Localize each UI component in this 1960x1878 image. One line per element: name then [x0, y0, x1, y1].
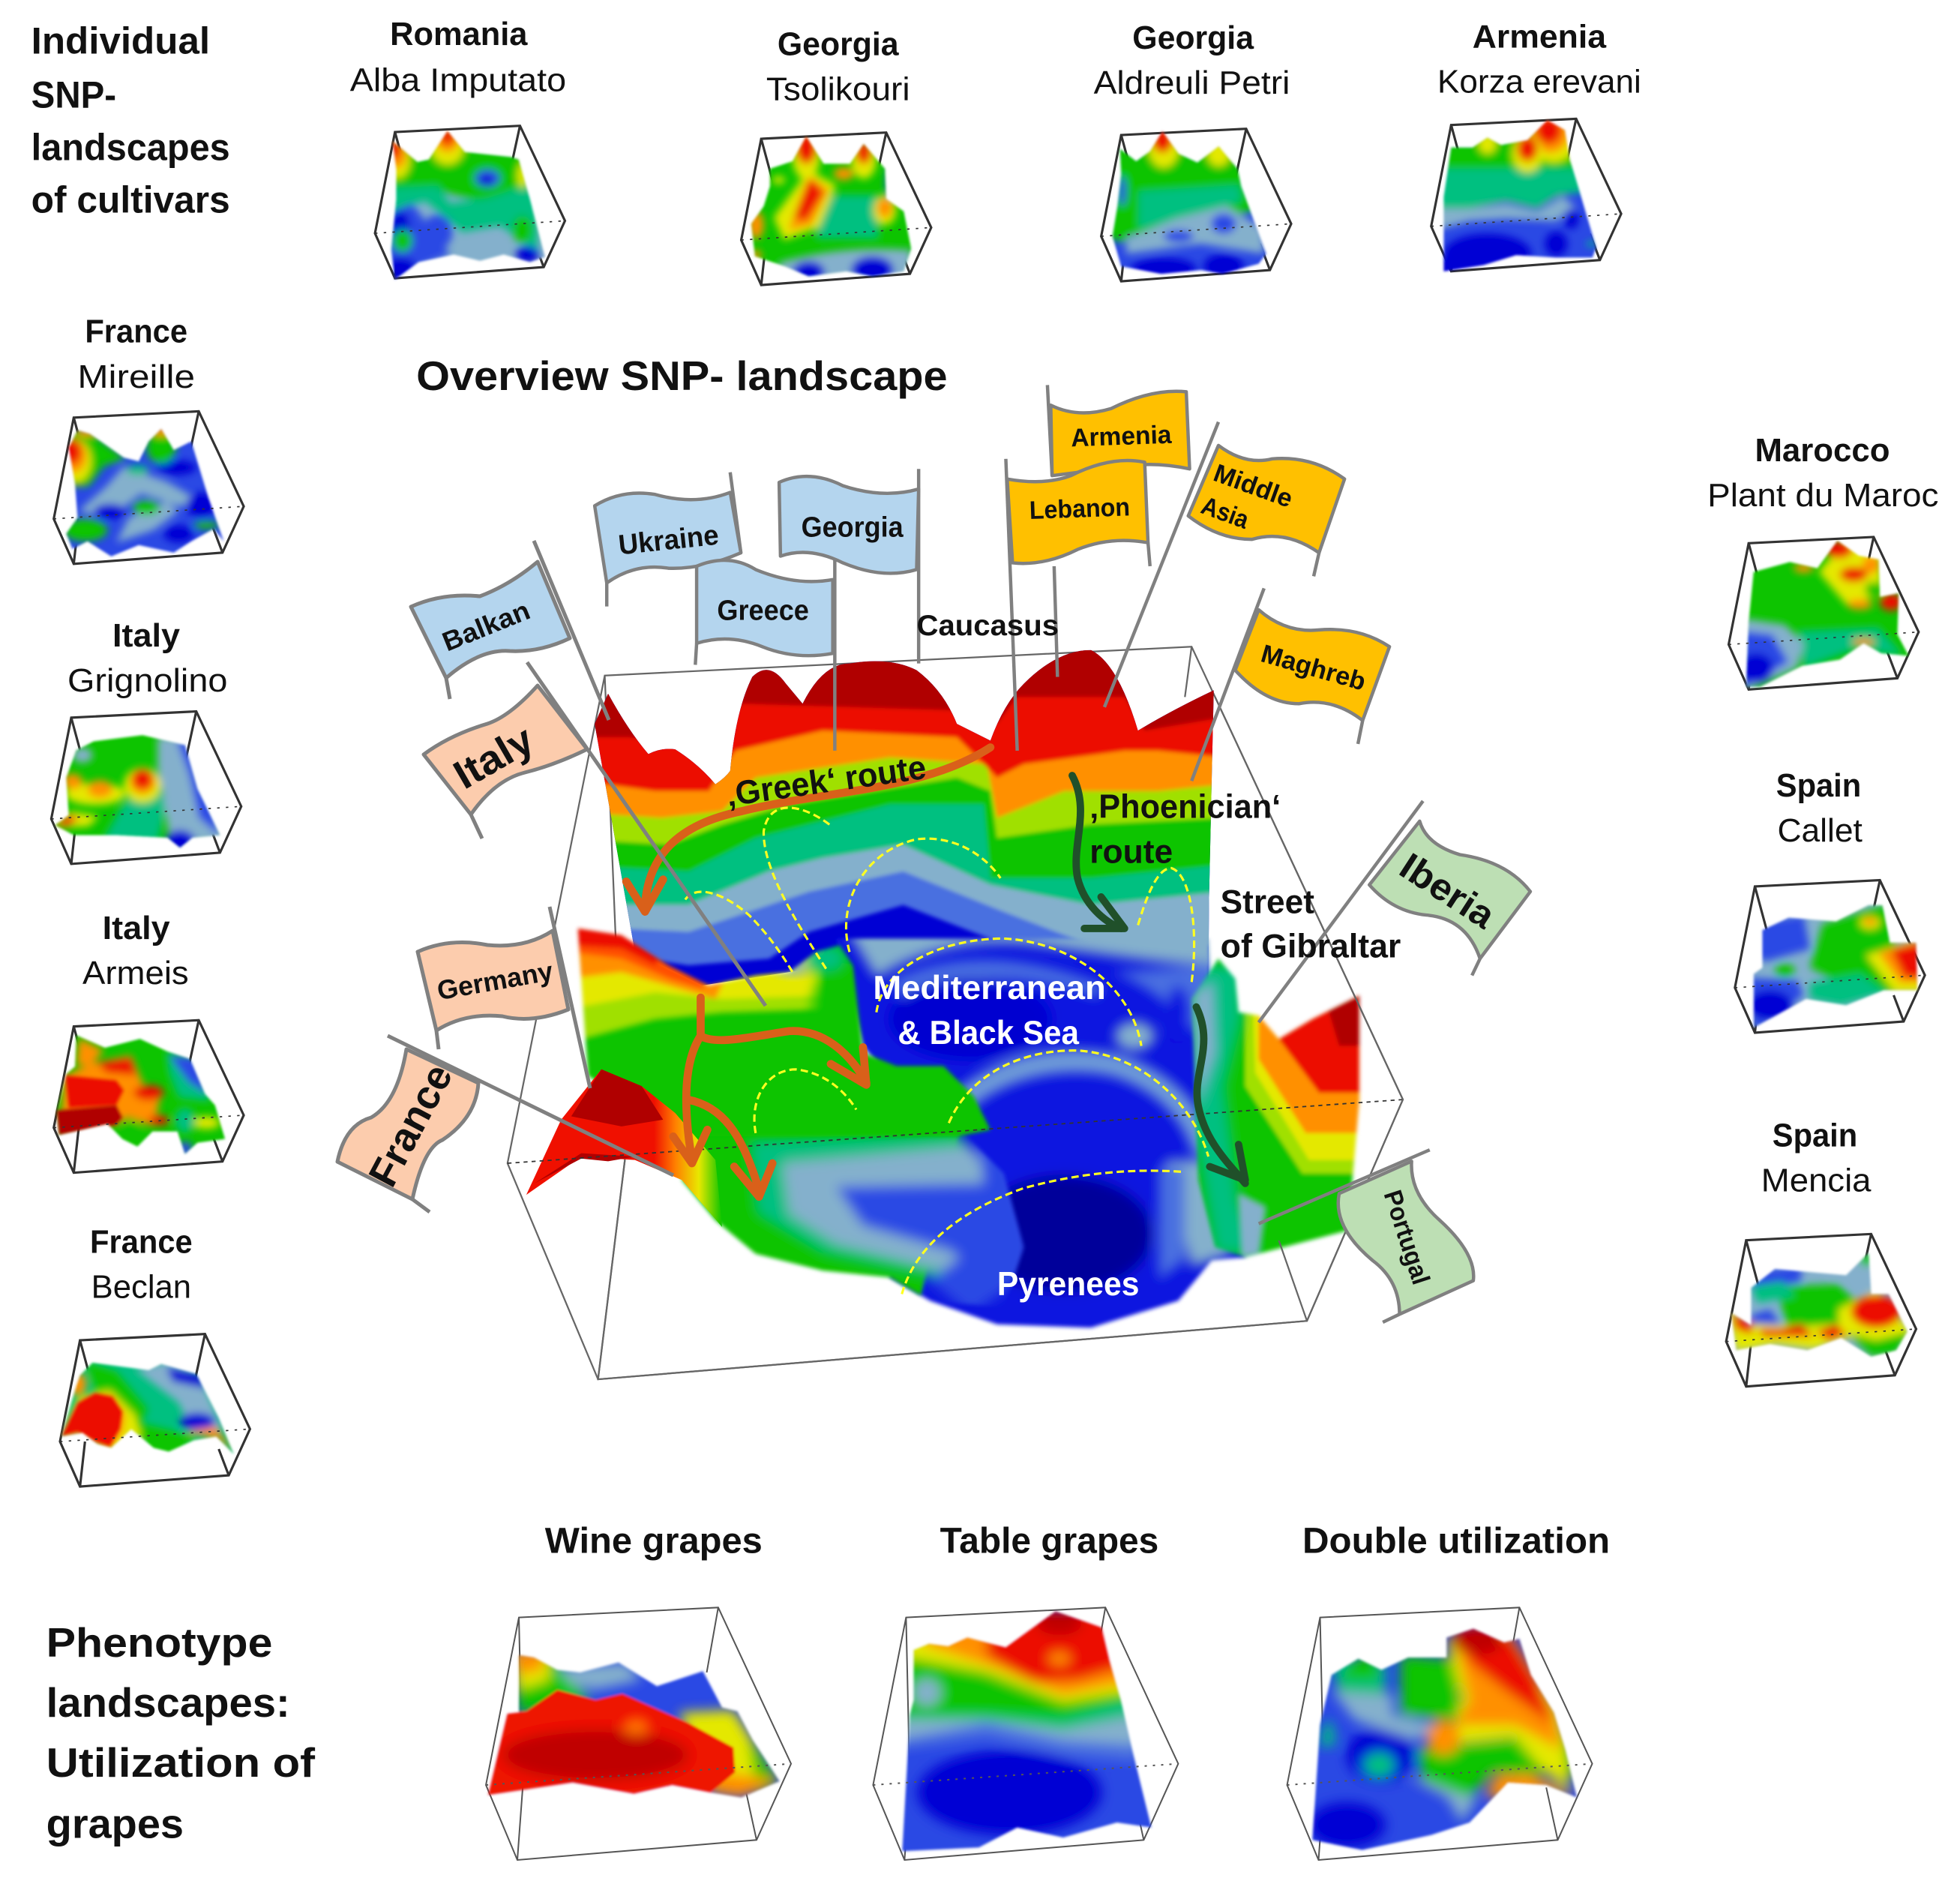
- heading: individual SNP-landscapes of cultivars: Individual: [31, 20, 210, 62]
- heading: phenotype landscapes: landscapes:: [46, 1679, 290, 1726]
- cultivar: Italy Armeis: Italy: [103, 910, 170, 946]
- label: Street of Gibraltar: [1221, 884, 1401, 964]
- cultivar: Georgia Tsolikouri: [742, 26, 931, 289]
- cultivar: Georgia Aldreuli Petri: Georgia: [1132, 20, 1254, 56]
- heading: phenotype landscapes: Utilization of: [46, 1739, 316, 1786]
- cultivar: Romania Alba Imputato: Alba Imputato: [350, 63, 566, 99]
- flag: Italy: [424, 662, 766, 1006]
- label: Phoenician route: ‚Phoenician‘: [1089, 788, 1281, 825]
- arrow: Greek route: [626, 747, 990, 912]
- cultivar: Georgia Aldreuli Petri: [1094, 20, 1291, 285]
- label: Caucasus: Caucasus: [916, 609, 1059, 642]
- label: Mediterranean and Black Sea: Mediterranean: [873, 970, 1106, 1006]
- flag: Armenia: [1047, 385, 1190, 476]
- label: Table grapes: Table grapes: [940, 1520, 1158, 1561]
- flag: Portugal: Portugal: [1378, 1186, 1435, 1288]
- label: Phoenician route: [1089, 788, 1281, 870]
- label: Wine grapes: Wine grapes: [545, 1520, 763, 1561]
- cultivar: Spain Mencia: [1726, 1118, 1917, 1390]
- arrow: route through Gibraltar: [1196, 1007, 1245, 1184]
- cultivar: Romania Alba Imputato: [350, 16, 566, 282]
- heading: phenotype landscapes: Phenotype: [46, 1619, 272, 1666]
- cultivar: Marocco Plant du Maroc: [1707, 433, 1939, 693]
- flag: Lebanon: [1007, 460, 1150, 566]
- yellow dashed basin outlines: [685, 808, 1209, 1294]
- box frame back edges: [508, 646, 1403, 1379]
- cultivar: Romania Alba Imputato: Romania: [390, 16, 528, 52]
- label: Street of Gibraltar: Street: [1221, 884, 1314, 920]
- flag: Georgia: [779, 476, 919, 573]
- cultivar: Italy Grignolino: [51, 618, 241, 868]
- label: Phoenician route: route: [1089, 833, 1173, 870]
- flag: Germany: [418, 907, 590, 1088]
- flag: France: [337, 1036, 673, 1212]
- label: Greek route: ‚Greek‘ route: [724, 749, 928, 814]
- arrow: Phoenician route: [1072, 776, 1125, 928]
- cultivar: France Beclan: Beclan: [91, 1269, 191, 1305]
- cultivar: Spain Callet: Spain: [1776, 768, 1861, 804]
- flag poles landing on the landscape: [835, 422, 1430, 1224]
- heading: individual SNP-landscapes of cultivars: landscapes: [31, 126, 230, 168]
- flag: Germany: Germany: [435, 956, 555, 1006]
- dotted base line: [508, 1100, 1403, 1163]
- label: Street of Gibraltar: of Gibraltar: [1221, 928, 1401, 964]
- cultivar: Italy Armeis: Armeis: [82, 956, 189, 992]
- cultivar: Marocco Plant du Maroc: Plant du Maroc: [1707, 478, 1939, 514]
- label: Double utilization: Double utilization: [1302, 1520, 1610, 1561]
- surface: double utilization: [1287, 1607, 1593, 1860]
- cultivar: Spain Callet: Callet: [1777, 813, 1863, 849]
- flag: Lebanon: Lebanon: [1029, 493, 1131, 525]
- heading: phenotype landscapes: grapes: [46, 1800, 184, 1846]
- cultivar: Georgia Aldreuli Petri: Aldreuli Petri: [1094, 65, 1290, 101]
- flag: Greece: [695, 560, 833, 664]
- cultivar: Marocco Plant du Maroc: Marocco: [1755, 433, 1890, 469]
- cultivar: Italy Grignolino: Italy: [112, 618, 180, 654]
- flag: Middle Asia: Middle: [1210, 459, 1296, 514]
- label: Mediterranean and Black Sea: & Black Sea: [898, 1015, 1080, 1052]
- surface: wine grapes: [481, 1607, 791, 1860]
- label: Mediterranean and Black Sea: [873, 970, 1106, 1052]
- ridge: German and Italian uplands: [574, 926, 993, 1139]
- flag: Georgia: Georgia: [802, 512, 904, 543]
- back wall: Caucasus mountains: [595, 650, 1214, 986]
- cultivar: Italy Grignolino: Grignolino: [67, 663, 227, 699]
- box frame front edges: [598, 697, 1403, 1379]
- heading: individual SNP-landscapes of cultivars: of cultivars: [31, 178, 230, 220]
- heading: overview SNP-landscape: Overview SNP- landscape: [416, 352, 948, 399]
- cultivar: Italy Armeis: [54, 910, 244, 1177]
- arrow: Greek route branches: [673, 998, 866, 1197]
- flag: Balkan: [411, 541, 609, 720]
- cultivar: France Beclan: France: [90, 1224, 193, 1260]
- flag: France: France: [360, 1057, 461, 1194]
- cultivar: France Beclan: [60, 1224, 250, 1490]
- sea basin: Mediterranean and Black Sea: [835, 935, 1248, 1331]
- right terrain: Iberia: [1185, 952, 1366, 1268]
- cultivar: France Mireille: [54, 314, 244, 568]
- flag: Balkan: Balkan: [438, 595, 534, 657]
- flag: Portugal: [1338, 1161, 1473, 1322]
- flag: Middle Asia: Asia: [1197, 491, 1253, 535]
- heading: individual SNP-landscapes of cultivars: [31, 20, 230, 220]
- cultivar: Spain Callet: [1735, 768, 1925, 1036]
- heading: individual SNP-landscapes of cultivars: SNP-: [31, 74, 116, 116]
- flag: Iberia: Iberia: [1392, 844, 1503, 938]
- cultivar: Spain Mencia: Spain: [1773, 1118, 1857, 1154]
- flag: Armenia: Armenia: [1071, 421, 1173, 452]
- cultivar: France Mireille: France: [85, 314, 187, 350]
- surface: table grapes: [873, 1607, 1178, 1860]
- flag: Italy: Italy: [446, 717, 541, 798]
- flag: Iberia: [1369, 821, 1530, 976]
- flag: Ukraine: Ukraine: [617, 519, 720, 560]
- flag: Greece: Greece: [717, 594, 809, 626]
- heading: phenotype landscapes: [46, 1619, 316, 1846]
- cultivar: France Mireille: Mireille: [77, 359, 195, 395]
- cultivar: Armenia Korza erevani: [1431, 19, 1641, 281]
- flag: Maghreb: [1235, 610, 1389, 744]
- flag: Ukraine: [595, 472, 741, 607]
- flag: Maghreb: Maghreb: [1258, 640, 1369, 697]
- cultivar: Georgia Tsolikouri: Tsolikouri: [766, 71, 910, 107]
- flag: Middle Asia: [1188, 446, 1344, 576]
- front middle terrain: [679, 1132, 1026, 1306]
- chart: central overview SNP landscape with flags and routes: [508, 385, 1530, 1379]
- cultivar: Spain Mencia: Mencia: [1761, 1163, 1872, 1199]
- peak: south-west France: [526, 1070, 722, 1227]
- cultivar: Armenia Korza erevani: Korza erevani: [1437, 64, 1641, 100]
- cultivar: Armenia Korza erevani: Armenia: [1473, 19, 1607, 55]
- cultivar: Georgia Tsolikouri: Georgia: [778, 26, 899, 62]
- label: Pyrenees: Pyrenees: [997, 1266, 1139, 1303]
